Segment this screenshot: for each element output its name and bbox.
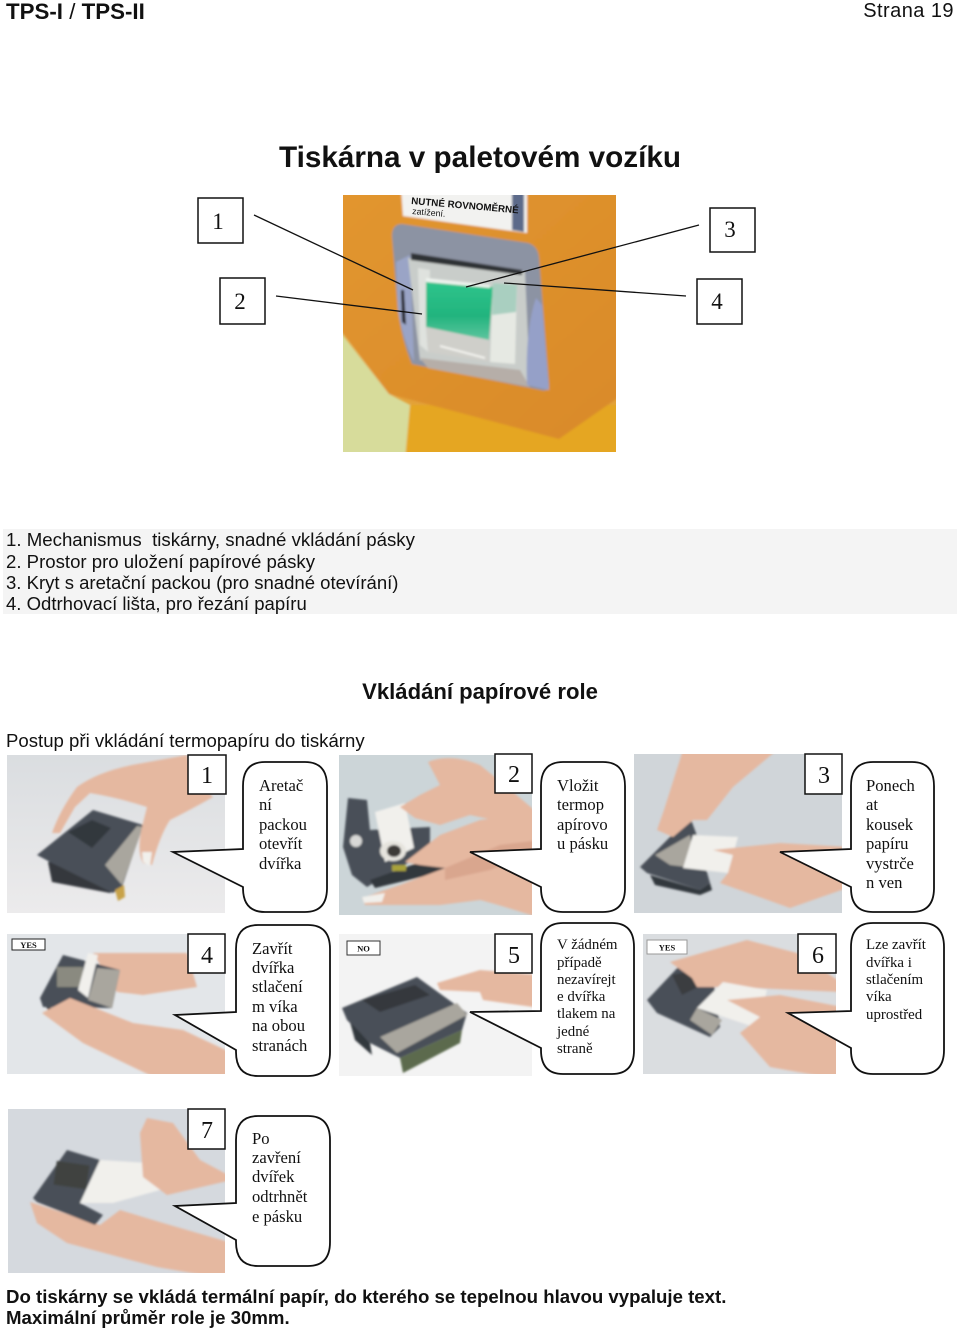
number box 3 [805, 754, 842, 794]
intro text: Postup při vkládání termopapíru do tiskárny [6, 730, 365, 751]
speech bubble 3: n ven [866, 873, 903, 892]
number box 7: 7 [201, 1118, 213, 1144]
speech bubble 7: e pásku [252, 1207, 303, 1226]
speech bubble 2: u pásku [557, 834, 609, 853]
photo: printer in pallet truck: zatížení. [412, 206, 446, 219]
speech bubble 3: papíru [866, 834, 909, 853]
step 3 panel [634, 750, 934, 913]
callout number 1: 1 [212, 209, 224, 234]
tag yes [647, 940, 687, 954]
tag no: NO [357, 944, 370, 954]
callout number 4 [697, 279, 742, 324]
speech bubble 5: tlakem na [557, 1006, 616, 1022]
number box 3: 3 [818, 763, 830, 789]
step 1 panel [7, 755, 327, 913]
speech bubble 2: apírovo [557, 815, 608, 834]
speech bubble 6: víka [866, 989, 892, 1005]
speech bubble 1: otevřít [259, 834, 303, 853]
speech bubble 2 [470, 762, 625, 912]
page header: page number: Strana 19 [863, 0, 954, 22]
speech bubble 7: Po [252, 1129, 270, 1148]
step 5 panel [339, 923, 634, 1076]
photo: printer in pallet truck [343, 195, 616, 452]
leader line 1 [254, 215, 413, 290]
closing note: Do tiskárny se vkládá termální papír, do kterého se tepelnou hlavou vypaluje text. [6, 1286, 726, 1307]
speech bubble 6: stlačením [866, 972, 923, 988]
leader line 4 [504, 283, 686, 296]
speech bubble 5 [470, 923, 634, 1074]
leader line 3 [466, 225, 699, 287]
parts legend panel [3, 529, 957, 614]
step 2 panel [339, 754, 625, 918]
callout number 1 [198, 198, 243, 243]
number box 5 [495, 934, 532, 973]
speech bubble 7: dvířek [252, 1167, 295, 1186]
speech bubble 1 [173, 762, 327, 912]
speech bubble 6: dvířka i [866, 955, 912, 971]
parts legend panel: 1. Mechanismus tiskárny, snadné vkládání pásky [6, 529, 416, 550]
parts legend panel: 4. Odtrhovací lišta, pro řezání papíru [6, 593, 307, 614]
speech bubble 1: dvířka [259, 854, 302, 873]
number box 2 [495, 754, 532, 793]
speech bubble 4: stranách [252, 1036, 308, 1055]
step 7 panel [8, 1109, 330, 1280]
speech bubble 5: případě [557, 955, 602, 971]
section heading: Vkládání papírové role [362, 679, 598, 704]
speech bubble 4 [175, 925, 330, 1076]
number box 7 [188, 1109, 225, 1149]
speech bubble 7 [175, 1116, 330, 1266]
parts legend panel: 2. Prostor pro uložení papírové pásky [6, 551, 316, 572]
speech bubble 6: uprostřed [866, 1007, 923, 1023]
callout number 2 [220, 278, 265, 324]
photo step 7 [8, 1109, 232, 1280]
number box 1: 1 [201, 763, 213, 789]
number box 4 [188, 934, 225, 973]
photo step 4 [7, 934, 232, 1080]
speech bubble 4: stlačení [252, 977, 303, 996]
speech bubble 3 [780, 762, 934, 912]
tag yes [12, 939, 45, 950]
speech bubble 4: Zavřít [252, 939, 293, 958]
photo step 6 [643, 934, 842, 1080]
tag yes: YES [659, 942, 676, 952]
step 6 panel [643, 923, 944, 1080]
tag yes: YES [20, 940, 37, 950]
parts legend panel: 3. Kryt s aretační packou (pro snadné otevírání) [6, 572, 398, 593]
number box 4: 4 [201, 943, 213, 969]
number box 5: 5 [508, 943, 520, 969]
speech bubble 1: Aretač [259, 776, 303, 795]
speech bubble 1: ní [259, 795, 272, 814]
photo step 2 [339, 755, 540, 918]
closing note [6, 1286, 726, 1328]
speech bubble 7: odtrhnět [252, 1187, 308, 1206]
speech bubble 3: kousek [866, 815, 914, 834]
number box 2: 2 [508, 762, 520, 788]
number box 1 [188, 755, 226, 794]
step 4 panel [7, 925, 330, 1080]
callout number 3 [710, 208, 755, 252]
speech bubble 5: e dvířka [557, 989, 606, 1005]
speech bubble 3: at [866, 795, 878, 814]
speech bubble 5: nezavírejt [557, 972, 617, 988]
closing note: Maximální průměr role je 30mm. [6, 1307, 290, 1328]
callout number 4: 4 [711, 289, 723, 314]
speech bubble 7: zavření [252, 1148, 301, 1167]
speech bubble 3: Ponech [866, 776, 916, 795]
speech bubble 4: m víka [252, 997, 298, 1016]
speech bubble 6 [788, 923, 944, 1074]
label sticker text on photo: NUTNÉ ROVNOMĚRNÉ [411, 195, 520, 216]
speech bubble 6: Lze zavřít [866, 937, 927, 953]
speech bubble 5: jedné [556, 1024, 590, 1040]
number box 6: 6 [812, 943, 824, 969]
photo step 3 [634, 750, 850, 913]
speech bubble 4: dvířka [252, 958, 295, 977]
callout number 3: 3 [724, 217, 736, 242]
title: Tiskárna v paletovém vozíku [279, 141, 681, 174]
photo step 1 [7, 755, 225, 913]
leader line 2 [276, 296, 422, 314]
tag no [347, 941, 380, 955]
speech bubble 3: vystrče [866, 854, 914, 873]
speech bubble 5: straně [557, 1041, 593, 1057]
callout number 2: 2 [234, 289, 246, 314]
photo step 5 [339, 934, 540, 1076]
speech bubble 2: Vložit [557, 776, 599, 795]
speech bubble 4: na obou [252, 1016, 306, 1035]
speech bubble 5: V žádném [557, 937, 618, 953]
speech bubble 2: termop [557, 795, 604, 814]
speech bubble 1: packou [259, 815, 308, 834]
number box 6 [798, 934, 836, 973]
